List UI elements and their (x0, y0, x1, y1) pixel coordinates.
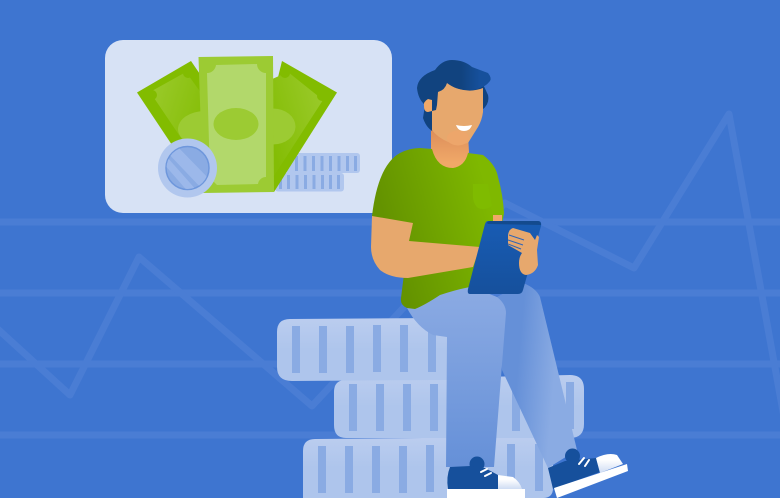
ear (424, 99, 432, 112)
coin top (277, 318, 450, 381)
banknote centre (198, 56, 274, 193)
background grid lines (0, 218, 780, 438)
hair back (423, 82, 488, 131)
tablet (468, 221, 541, 294)
banknote left (137, 61, 232, 193)
hand (508, 228, 539, 275)
stack of coins (277, 318, 584, 498)
arm (371, 216, 480, 278)
banknote right (250, 61, 337, 192)
coin (158, 138, 217, 198)
leg front (407, 285, 506, 467)
coins stack small (275, 153, 360, 192)
head (417, 60, 491, 146)
shirt (372, 148, 504, 309)
shoe right (548, 448, 628, 498)
chin shadow (447, 130, 469, 146)
hand behind tablet (493, 215, 502, 223)
smile (456, 125, 472, 131)
neck (431, 125, 469, 172)
panel: money card (105, 40, 392, 213)
background line chart (0, 114, 780, 450)
hair top (417, 60, 491, 111)
shoe left (447, 456, 525, 498)
leg back (497, 283, 577, 468)
coin bottom (303, 437, 553, 498)
face (432, 83, 483, 144)
person (371, 60, 628, 498)
coin middle (334, 375, 584, 438)
shirt pocket (473, 184, 492, 209)
